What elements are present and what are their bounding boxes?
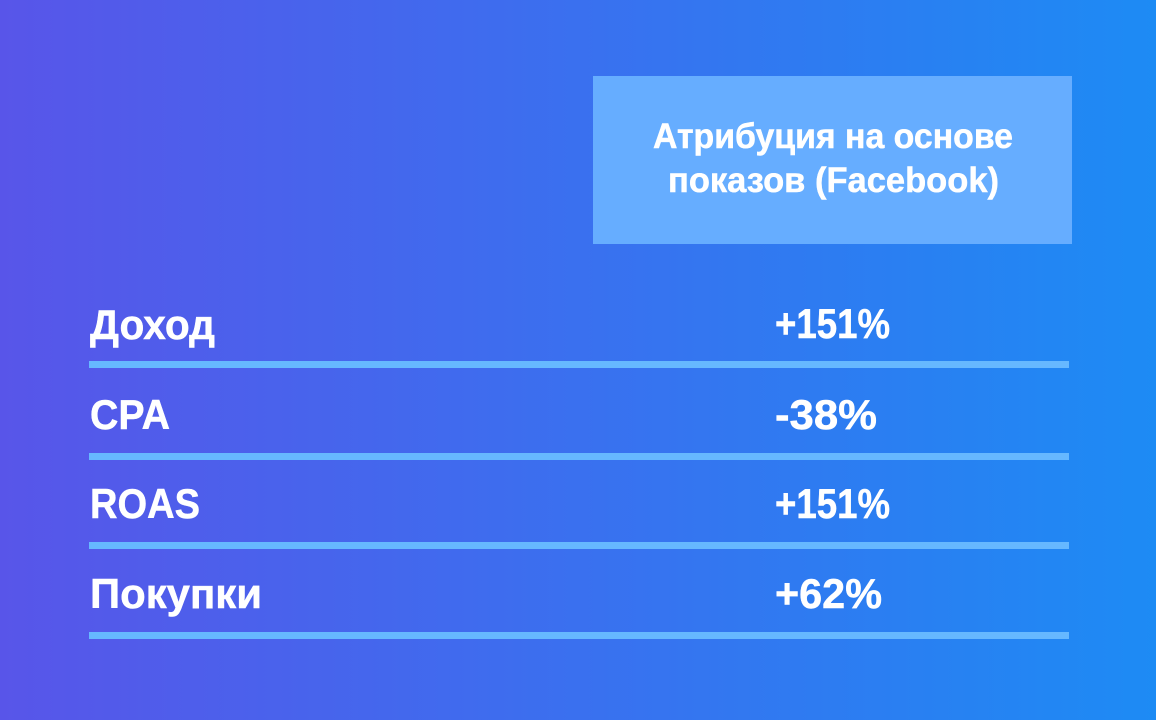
- column header: Атрибуция на основе: [653, 117, 1013, 156]
- row: Доход: Доход: [90, 301, 215, 348]
- column header: [593, 76, 1072, 244]
- row: CPA: CPA: [90, 391, 170, 438]
- row: CPA: -38%: [775, 391, 877, 438]
- column header: показов (Facebook): [668, 161, 999, 200]
- row: Доход: +151%: [775, 300, 890, 347]
- row: ROAS: ROAS: [90, 480, 200, 527]
- row: Покупки: Покупки: [90, 570, 262, 617]
- row: Покупки: +62%: [775, 570, 882, 617]
- row: CPA: [89, 391, 1069, 460]
- row: ROAS: [89, 480, 1069, 549]
- row: Доход: [89, 300, 1069, 368]
- row: ROAS: +151%: [775, 480, 890, 527]
- row: Покупки: [89, 570, 1069, 639]
